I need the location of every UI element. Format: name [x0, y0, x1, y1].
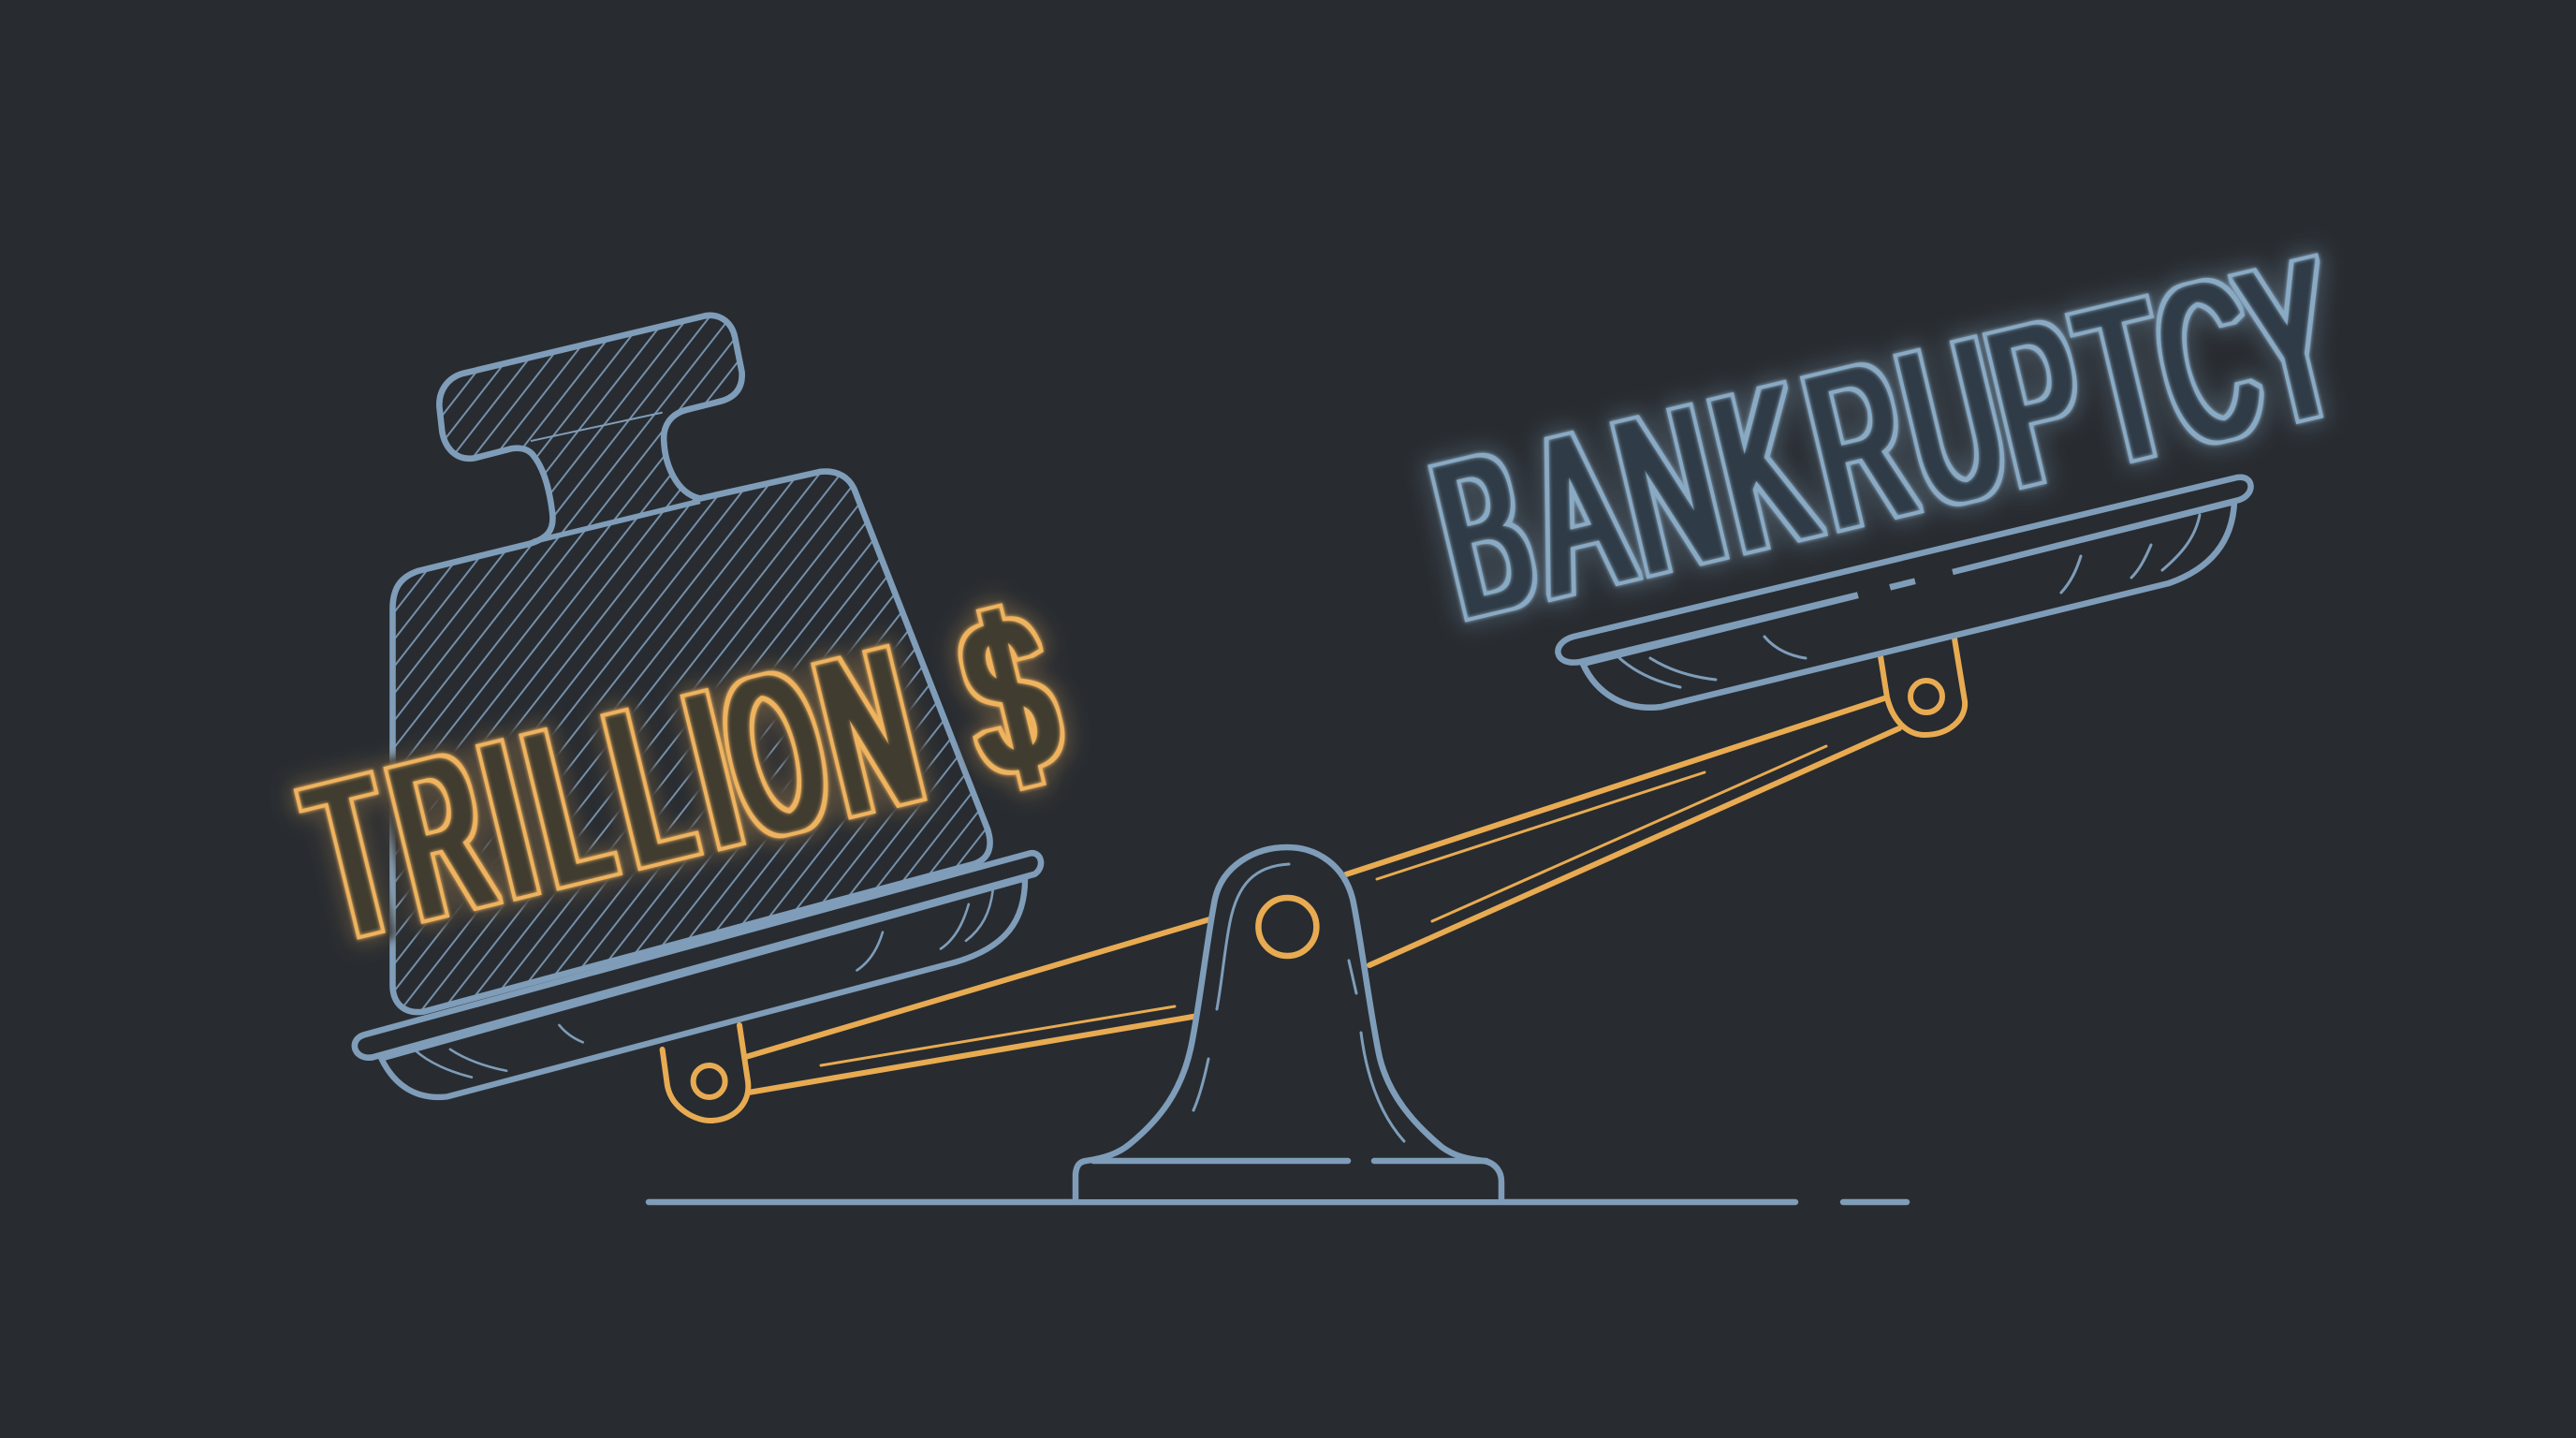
weight with hatch	[392, 315, 990, 1012]
label: dollar sign: $	[944, 565, 1076, 824]
ground line	[649, 1199, 1907, 1205]
left pan	[355, 853, 1041, 1097]
label: TRILLION: TRILLION	[290, 601, 937, 986]
label: BANKRUPTCY: BANKRUPTCY	[1415, 211, 2360, 665]
fulcrum post	[1076, 847, 1501, 1199]
right hanger lug	[1881, 638, 1965, 735]
beam	[746, 697, 1899, 1093]
left hanger lug	[663, 1025, 748, 1121]
pivot ring	[1258, 898, 1316, 956]
right pan	[1558, 477, 2251, 708]
